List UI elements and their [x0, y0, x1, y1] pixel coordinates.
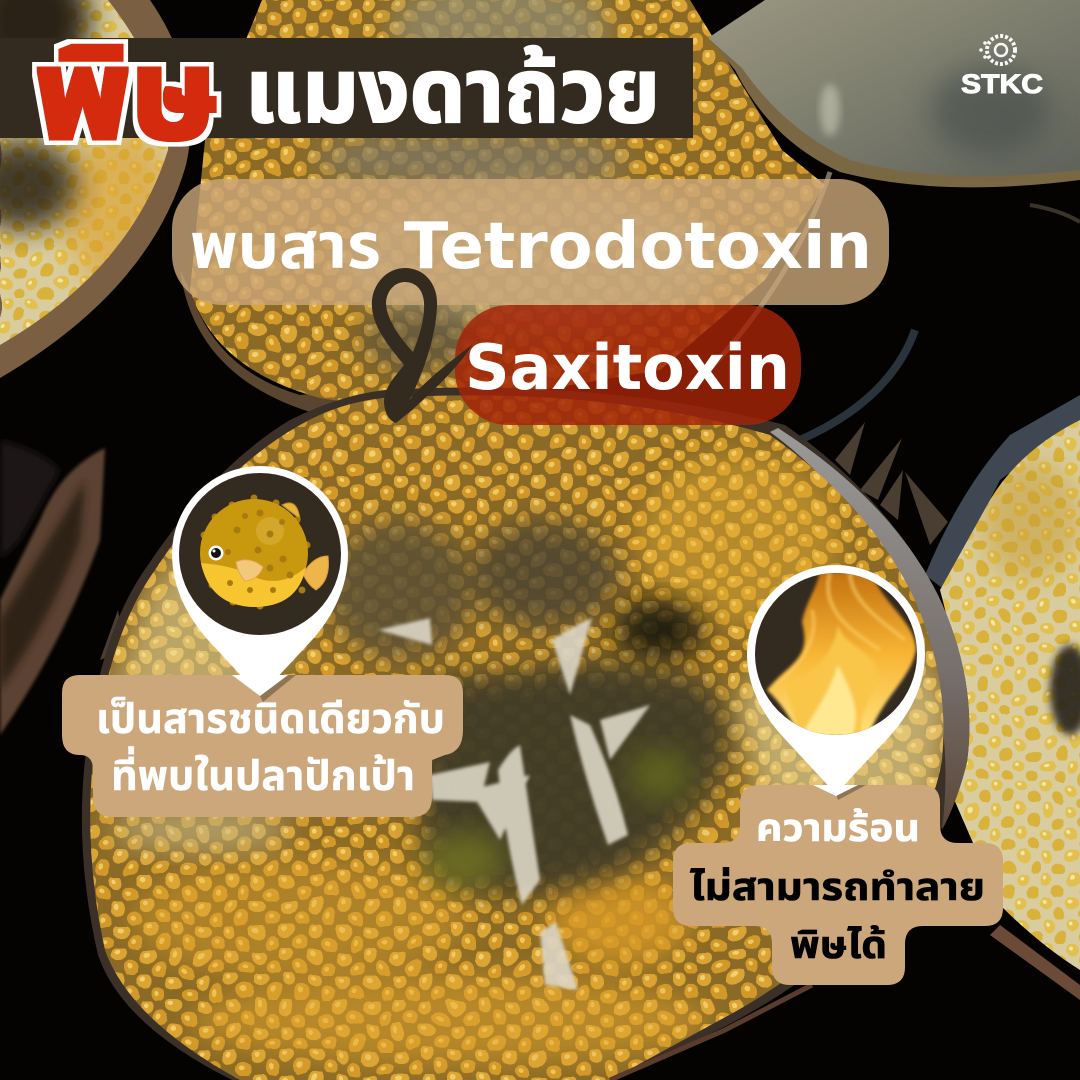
pill: Saxitoxin	[455, 305, 801, 425]
pin: pufferfish	[172, 466, 348, 696]
icon: pufferfish	[200, 494, 328, 610]
pill: Tetrodotoxin	[172, 179, 889, 305]
label: heat cannot destroy the toxin: พิษได้	[790, 925, 887, 967]
shell: main crab	[50, 370, 1000, 1080]
pill: Saxitoxin: Saxitoxin	[465, 331, 790, 404]
label: heat cannot destroy the toxin	[673, 785, 1003, 985]
shell: top left	[0, 0, 190, 378]
ampersand	[372, 268, 472, 423]
label: same substance as pufferfish: ที่พบในปลาปักเป้า	[111, 746, 415, 799]
pin body	[172, 466, 348, 696]
title banner	[0, 24, 693, 165]
title word: poison (red): พิษ	[35, 24, 219, 165]
pill: Tetrodotoxin: พบสาร Tetrodotoxin	[190, 210, 872, 284]
pin: fire	[747, 565, 930, 794]
label: same substance as pufferfish: เป็นสารชนิดเดียวกับ	[96, 695, 445, 742]
logo: STKC	[961, 36, 1043, 99]
pin body	[747, 565, 925, 794]
spikes right of main shell	[100, 422, 948, 660]
logo: STKC: STKC	[961, 69, 1043, 99]
label: heat cannot destroy the toxin: ความร้อน	[756, 808, 920, 850]
shell: right	[920, 395, 1080, 1000]
shell: top centre	[170, 0, 915, 440]
title word: horseshoe crab: แมงดาถ้วย	[245, 42, 660, 142]
shell: top right grey	[708, 0, 1080, 222]
label: same substance as pufferfish	[62, 675, 463, 817]
shells: left dark spines	[0, 440, 105, 735]
label: heat cannot destroy the toxin: ไม่สามารถทำลาย	[690, 867, 985, 909]
lower right bottom rim	[610, 985, 812, 1080]
icon: flames	[765, 573, 917, 735]
